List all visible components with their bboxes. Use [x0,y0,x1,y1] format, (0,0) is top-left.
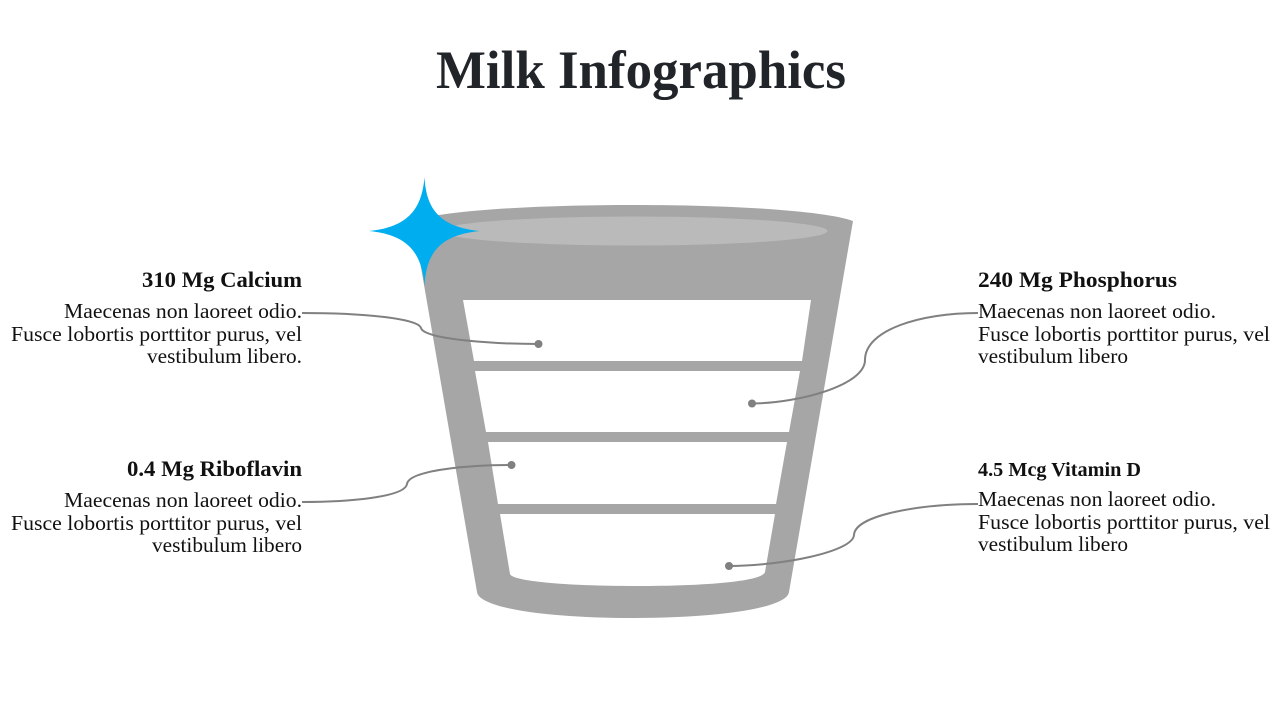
text block: riboflavin: 0.4 Mg Riboflavin [127,456,302,481]
connector: riboflavin [302,461,516,502]
text block: calcium: vestibulum libero. [147,344,302,368]
title: Milk Infographics [436,40,846,100]
text block: riboflavin [11,456,302,557]
text block: phosphorus: Fusce lobortis porttitor purus, vel [978,322,1270,346]
text block: riboflavin: vestibulum libero [152,533,302,557]
text block: phosphorus: 240 Mg Phosphorus [978,267,1177,292]
text block: calcium [11,267,302,368]
text block: riboflavin: Fusce lobortis porttitor purus, vel [11,511,302,535]
milk glass [413,205,853,618]
text block: vitamin D: 4.5 Mcg Vitamin D [978,459,1141,481]
text block: calcium: Fusce lobortis porttitor purus, vel [11,322,302,346]
text block: calcium: 310 Mg Calcium [142,267,302,292]
glass body [413,205,853,618]
text block: vitamin D [978,459,1270,556]
text block: vitamin D: vestibulum libero [978,532,1128,556]
text block: phosphorus [978,267,1270,368]
connector: calcium [302,313,542,348]
text block: vitamin D: Maecenas non laoreet odio. [978,487,1216,511]
connector: phosphorus [748,313,978,408]
text block: calcium: Maecenas non laoreet odio. [64,299,302,323]
text block: phosphorus: vestibulum libero [978,344,1128,368]
text block: riboflavin: Maecenas non laoreet odio. [64,488,302,512]
milk surface ellipse [440,216,828,246]
text block: phosphorus: Maecenas non laoreet odio. [978,299,1216,323]
text block: vitamin D: Fusce lobortis porttitor purus, vel [978,510,1270,534]
icon: blue sparkle star [369,177,480,286]
connector: vitamin D [725,504,978,570]
